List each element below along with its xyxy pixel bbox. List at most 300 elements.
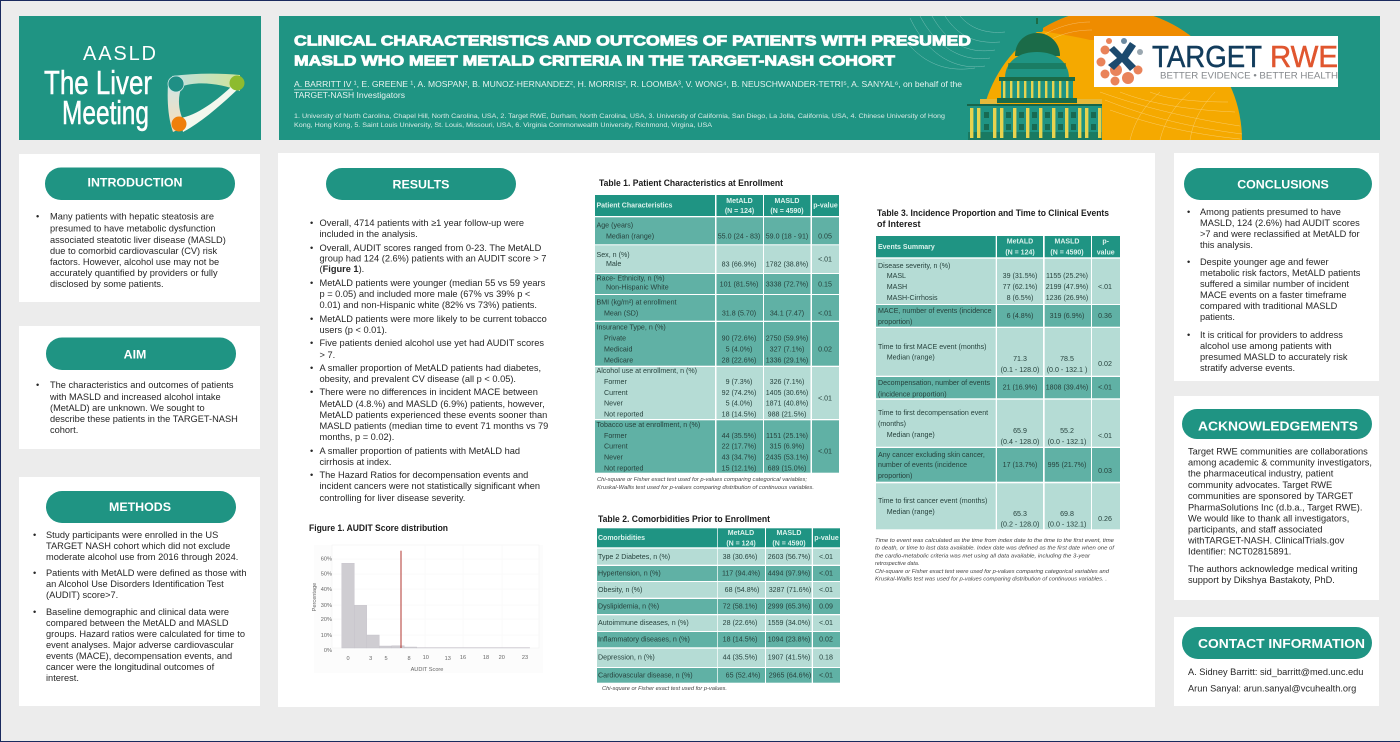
- x-axis labels: 13: [445, 656, 451, 662]
- table 3: clinical events: 39 (31.5%): [1003, 272, 1037, 280]
- table 3: clinical events: 1236 (26.9%): [1046, 294, 1088, 302]
- logo text: AASLD: AASLD: [83, 43, 156, 65]
- table 1: patient characteristics: 55.0 (24 - 83): [718, 232, 760, 240]
- text block: methods: interest.: [46, 673, 79, 683]
- text block: methods: compared between the MetALD and MASLD: [46, 618, 229, 628]
- table 1: patient characteristics: 1151 (25.1%): [766, 432, 808, 440]
- table 3: clinical events: [876, 236, 1120, 529]
- text block: contacts: Arun Sanyal: arun.sanyal@vcuhealth.org: [1188, 684, 1356, 694]
- axis title: Percentage: Percentage: [312, 583, 318, 611]
- affiliations: 1. University of North Carolina, Chapel Hill, North Carolina, USA, 2. Target RWE, Durham, North Carolina, USA, 3. University of California, San Diego, La Jolla, California, USA, 4. Chinese University of Hong: [294, 113, 946, 120]
- text block: acknowledgements: community advocates. Target RWE: [1188, 480, 1332, 490]
- text block: results bullets: MetALD (4.8.%) and MASLD (6.9%) patients, however,: [320, 399, 545, 409]
- table 3: clinical events: 0.36: [1098, 312, 1112, 320]
- text block: results bullets: users (p < 0.01).: [320, 325, 387, 335]
- text block: acknowledgements: among academic & community investigators,: [1188, 458, 1372, 468]
- authors: A. BARRITT IV ¹, E. GREENE ¹, A. MOSPAN², B. MUNOZ-HERNANDEZ², H. MORRIS², R. LOOMBA³, V. WONG⁴, B. NEUSCHWANDER-TETRI⁵, A. SANYAL⁶, on behalf of the: [294, 79, 962, 89]
- table 1: patient characteristics: Medicare: [604, 356, 633, 364]
- x-axis labels: 5: [384, 656, 388, 662]
- text block: introduction: Many patients with hepatic steatosis are: [50, 212, 214, 222]
- table 3: clinical events: MASL: [887, 272, 906, 280]
- text block: introduction: associated steatotic liver disease (MASLD): [50, 235, 226, 245]
- cutoff line: [400, 551, 402, 648]
- table 1: patient characteristics: 31.8 (5.70): [722, 310, 756, 318]
- table 2: comorbidities: Autoimmune diseases, n (%): [598, 619, 689, 627]
- table 1: patient characteristics: Current: [604, 389, 628, 397]
- heading: conclusions: CONCLUSIONS: [1237, 178, 1329, 192]
- table 1: patient characteristics: 1336 (29.1%): [766, 356, 808, 364]
- text block: introduction: factors. However, alcohol use may not be: [50, 257, 219, 267]
- table 1: patient characteristics: Insurance Type, n (%): [596, 324, 666, 332]
- text block: conclusions: Despite younger age and fewer: [1200, 257, 1329, 267]
- table 3: clinical events: 319 (6.9%): [1050, 312, 1084, 320]
- table 3: clinical events: MASH-Cirrhosis: [887, 294, 938, 302]
- logo text: The Liver Meeting: [44, 64, 152, 131]
- table 3: clinical events: 1155 (25.2%): [1046, 272, 1088, 280]
- x-axis labels: 16: [460, 655, 466, 661]
- table 2: comorbidities: (N = 4590): [772, 540, 806, 548]
- table 2: comorbidities: Obesity, n (%): [598, 586, 642, 594]
- text block: results bullets: cirrhosis at index.: [320, 457, 391, 467]
- table 3: clinical events: 77 (62.1%): [1003, 283, 1037, 291]
- heading: figure 1: Figure 1. AUDIT Score distribution: [309, 523, 448, 533]
- icon: Target RWE cluster: [1096, 38, 1143, 86]
- text block: results bullets: incident cancers were not statistically significant when: [320, 481, 540, 491]
- authors: TARGET-NASH Investigators: [294, 90, 405, 100]
- text block: aim: describe these patients in the TARGET-NASH: [50, 414, 238, 424]
- table 3: clinical events: 78.5: [1060, 355, 1074, 363]
- table 3: clinical events: MASLD: [1055, 238, 1079, 246]
- table 1: patient characteristics: 1871 (40.8%): [766, 400, 808, 408]
- text block: results bullets: •: [310, 387, 313, 397]
- text block: methods: TARGET NASH cohort which did not exclude: [46, 541, 230, 551]
- banner artwork: sunburst circle and capitol: [906, 16, 1242, 140]
- text block: results bullets: 0.01) and non-Hispanic white (82% vs 73%) patients.: [320, 300, 537, 310]
- panel: results: [278, 153, 1155, 707]
- table 3: clinical events: proportion): [878, 318, 912, 326]
- text block: acknowledgements: the pharmaceutical industry, patient: [1188, 469, 1334, 479]
- table 1: patient characteristics: Age (years): [596, 222, 633, 230]
- table 2: comorbidities: Comorbidities: [598, 535, 645, 542]
- table 1: patient characteristics: 90 (72.6%): [722, 334, 756, 342]
- panel: acknowledgements: [1174, 396, 1379, 600]
- table 1: patient characteristics: 1405 (30.6%): [766, 389, 808, 397]
- text block: conclusions: alcohol use among patients with: [1200, 341, 1332, 351]
- text block: results bullets: (Figure 1).: [320, 264, 364, 274]
- table 1: patient characteristics: MetALD: [726, 198, 753, 205]
- table 3: clinical events: Disease severity, n (%): [878, 262, 950, 270]
- table 1: patient characteristics: 326 (7.1%): [770, 378, 804, 386]
- panel: AASLD The Liver Meeting logo: [19, 16, 261, 140]
- table 1: patient characteristics: 28 (22.6%): [722, 356, 756, 364]
- table 2: comorbidities: 1559 (34.0%): [768, 619, 810, 627]
- text block: methods: cancer were the longitudinal outcomes of: [46, 662, 215, 672]
- x-axis labels: 0: [346, 656, 350, 662]
- table 1: patient characteristics: <.01: [818, 448, 832, 456]
- x-axis labels: 8: [407, 656, 411, 662]
- table 1: patient characteristics: Race- Ethnicity, n (%): [596, 274, 665, 282]
- table 2: comorbidities: Dyslipidemia, n (%): [598, 603, 659, 611]
- text block: results bullets: obesity, and prevalent CV disease (all p < 0.05).: [320, 374, 516, 384]
- text block: methods: •: [33, 568, 36, 578]
- text block: conclusions: compared with traditional MASLD: [1200, 301, 1338, 311]
- table 3: clinical events: (N = 4590): [1050, 250, 1084, 256]
- y-axis labels: 20%: [321, 617, 332, 623]
- table 1: patient characteristics: 315 (6.9%): [770, 442, 804, 450]
- table 1: patient characteristics: 5 (4.0%): [726, 346, 752, 354]
- table 3: clinical events: 69.8: [1060, 510, 1074, 518]
- table 1: patient characteristics: 34.1 (7.47): [770, 310, 804, 318]
- text block: introduction: disclosed by some patients.: [50, 279, 164, 289]
- table 1: patient characteristics: 92 (74.2%): [722, 389, 756, 397]
- table 1: patient characteristics: 43 (34.7%): [722, 454, 756, 462]
- table 2: comorbidities: [597, 528, 840, 683]
- text block: results bullets: group had 124 (2.6%) patients with an AUDIT score > 7: [320, 254, 546, 264]
- table 3: clinical events: 71.3: [1013, 355, 1027, 363]
- text block: acknowledgements: support by Dikshya Bastakoty, PhD.: [1188, 575, 1335, 585]
- y-axis labels: 30%: [321, 603, 332, 609]
- panel: conclusions: [1174, 153, 1379, 381]
- affiliations: [294, 113, 946, 129]
- table 3: clinical events: (0.0 - 132.1): [1048, 438, 1086, 446]
- table 1: patient characteristics: Former: [604, 432, 627, 440]
- table 1: patient characteristics: Sex, n (%): [596, 251, 630, 259]
- table 3: clinical events: <.01: [1098, 432, 1112, 440]
- text block: aim: cohort.: [50, 425, 78, 435]
- table 3: clinical events: Events Summary: [878, 244, 935, 251]
- table 1: patient characteristics: 689 (15.0%): [768, 464, 806, 472]
- table 2: comorbidities: 0.02: [819, 636, 833, 644]
- heading: introduction: INTRODUCTION: [88, 176, 183, 190]
- table 1: patient characteristics: p-value: [813, 202, 838, 210]
- footnote: table 3: the cardio-metabolic criteria was met using all data available, including the 3-year: [875, 554, 1090, 560]
- text block: results bullets: Overall, 4714 patients with ≥1 year follow-up were: [320, 218, 524, 228]
- table 1: patient characteristics: Alcohol use at enrollment, n (%): [596, 367, 697, 375]
- authors: [294, 79, 962, 100]
- table 1: patient characteristics: Medicaid: [604, 346, 632, 354]
- table 3: clinical events: 995 (21.7%): [1048, 461, 1086, 469]
- table 3: clinical events: Median (range): [887, 431, 935, 439]
- logo: Target RWE: BETTER EVIDENCE • BETTER HEALTH: [1160, 70, 1338, 80]
- text block: contacts: A. Sidney Barritt: sid_barritt@med.unc.edu: [1188, 667, 1363, 677]
- title: [294, 32, 971, 70]
- text block: results bullets: MetALD patients experienced these events sooner than: [320, 410, 547, 420]
- text block: conclusions: stratify adverse events.: [1200, 363, 1295, 373]
- text block: conclusions: •: [1187, 257, 1190, 267]
- table 2: comorbidities: <.01: [819, 672, 833, 680]
- text block: conclusions: this analysis.: [1200, 240, 1253, 250]
- table 1: patient characteristics: 2435 (53.1%): [766, 454, 808, 462]
- table 1: patient characteristics: BMI (kg/m²) at enrollment: [596, 298, 677, 306]
- text block: methods: an Alcohol Use Disorders Identification Test: [46, 579, 224, 589]
- table 2: comorbidities: <.01: [819, 553, 833, 561]
- table 1: patient characteristics: 101 (81.5%): [720, 280, 758, 288]
- text block: conclusions: >7 and were reclassified at MetALD for: [1200, 229, 1360, 239]
- panel: title banner: [279, 16, 1380, 140]
- footnote: table 1: [597, 477, 814, 491]
- table 3: clinical events: 2199 (47.9%): [1046, 283, 1088, 291]
- histogram bars: [342, 563, 530, 648]
- heading: aim: [46, 338, 236, 370]
- table 3: clinical events: 0.02: [1098, 360, 1112, 368]
- text block: acknowledgements: Identifier: NCT02815891.: [1188, 547, 1291, 557]
- table 1: patient characteristics: <.01: [818, 394, 832, 402]
- text block: methods: groups. Hazard ratios were calculated for time to: [46, 629, 245, 639]
- table 1: patient characteristics: Never: [604, 454, 624, 462]
- title: MASLD WHO MEET METALD CRITERIA IN THE TARGET-NASH COHORT: [294, 52, 896, 70]
- heading: acknowledgements: [1182, 409, 1372, 439]
- heading: methods: METHODS: [109, 500, 171, 514]
- axis title: AUDIT Score: AUDIT Score: [411, 667, 443, 673]
- table 3: clinical events: Median (range): [887, 508, 935, 516]
- footnote: table 3: Chi-square or Fisher exact test were used for p-values comparing categorical variables and: [875, 569, 1110, 575]
- logo: Target RWE: TARGET: [1152, 39, 1262, 74]
- table 2: comorbidities: Inflammatory diseases, n (%): [598, 636, 690, 644]
- text block: results bullets: p = 0.05) and included more male (67% vs 39% p <: [320, 289, 530, 299]
- footnote: table 3: [875, 538, 1115, 583]
- text block: results bullets: The Hazard Ratios for decompensation events and: [320, 470, 528, 480]
- table 2: comorbidities: 38 (30.6%): [723, 553, 757, 561]
- icon: liver triangle swoosh: [168, 74, 244, 132]
- affiliations: Kong, Hong Kong, 5. Saint Louis University, St. Louis, Missouri, USA, 6. Virginia Commonwealth University, Richmond, Virgina, USA: [294, 122, 713, 129]
- table 2: comorbidities: 2999 (65.3%): [768, 603, 810, 611]
- table 3: clinical events: (months): [878, 420, 906, 428]
- text block: introduction: due to comorbid cardiovascular (CV) risk: [50, 246, 217, 256]
- table 2: comorbidities: 65 (52.4%): [726, 672, 760, 680]
- table 2: comorbidities: 0.09: [819, 603, 833, 611]
- heading: aim: AIM: [124, 348, 146, 362]
- table 1: patient characteristics: 0.02: [818, 346, 832, 354]
- text block: results bullets: Overall, AUDIT scores ranged from 0-23. The MetALD: [320, 243, 542, 253]
- text block: results bullets: A smaller proportion of MetALD patients had diabetes,: [320, 363, 541, 373]
- text block: results bullets: A smaller proportion of patients with MetALD had: [320, 446, 520, 456]
- table 3: clinical events: MetALD: [1007, 238, 1033, 246]
- table 2: comorbidities: 2603 (56.7%): [768, 553, 810, 561]
- text block: methods: Patients with MetALD were defined as those with: [46, 568, 247, 578]
- text block: introduction: accurately quantified by providers or fully: [50, 268, 218, 278]
- text block: methods: Study participants were enrolled in the US: [46, 530, 218, 540]
- text block: conclusions: MASLD, 124 (2.6%) had AUDIT scores: [1200, 218, 1360, 228]
- table 1: patient characteristics: 44 (35.5%): [722, 432, 756, 440]
- panel: aim: [19, 326, 260, 449]
- table 2: comorbidities: <.01: [819, 619, 833, 627]
- text block: acknowledgements: The authors acknowledge medical writing: [1188, 564, 1358, 574]
- table 3: clinical events: 65.3: [1013, 510, 1027, 518]
- y-axis labels: 50%: [321, 572, 332, 578]
- text block: methods: (AUDIT) score>7.: [46, 590, 118, 600]
- text block: acknowledgements: PharmaSolutions Inc (d.b.a., Target RWE).: [1188, 503, 1362, 513]
- table 2: comorbidities: Hypertension, n (%): [598, 570, 661, 578]
- table 1: patient characteristics: Median (range): [606, 232, 654, 240]
- table 3: clinical events: Time to first MACE event (months): [878, 343, 987, 351]
- table 2: comorbidities: 2965 (64.6%): [769, 672, 811, 680]
- table 1: patient characteristics: 5 (4.0%): [726, 400, 752, 408]
- text block: conclusions: It is critical for providers to address: [1200, 330, 1343, 340]
- text block: results bullets: •: [310, 243, 313, 253]
- table 1: patient characteristics: 9 (7.3%): [726, 378, 752, 386]
- table 1: patient characteristics: (N = 124): [725, 208, 754, 215]
- table 1: patient characteristics: Patient Characteristics: [596, 202, 672, 210]
- table 2: comorbidities: 0.18: [819, 654, 833, 662]
- table 1: patient characteristics: Non-Hispanic White: [606, 284, 669, 292]
- y-axis labels: 0%: [324, 648, 332, 654]
- table 2: comorbidities: 1094 (23.8%): [768, 636, 810, 644]
- table 1: patient characteristics: Former: [604, 378, 627, 386]
- heading: table 3: of Interest: [877, 219, 921, 229]
- table 3: clinical events: 65.9: [1013, 427, 1027, 435]
- text block: conclusions: metabolic risk factors, MetALD patients: [1200, 268, 1361, 278]
- table 3: clinical events: 1808 (39.4%): [1046, 384, 1088, 392]
- text block: methods: Baseline demographic and clinical data were: [46, 607, 229, 617]
- table 3: clinical events: 8 (6.5%): [1007, 294, 1033, 302]
- heading: table 3: [877, 208, 1109, 229]
- text block: results bullets: •: [310, 338, 313, 348]
- table 3: clinical events: 55.2: [1060, 427, 1074, 435]
- logo: Target RWE: [1094, 36, 1338, 87]
- text block: methods: events (MACE), decompensation events, and: [46, 651, 232, 661]
- table 2: comorbidities: MetALD: [728, 530, 754, 537]
- table 1: patient characteristics: Not reported: [604, 464, 643, 472]
- text block: results bullets: Five patients denied alcohol use yet had AUDIT scores: [320, 338, 544, 348]
- table 2: comorbidities: (N = 124): [726, 540, 756, 548]
- logo text: The Liver Meeting: Meeting: [62, 94, 149, 131]
- table 2: comorbidities: Cardiovascular disease, n (%): [598, 672, 693, 680]
- title: CLINICAL CHARACTERISTICS AND OUTCOMES OF PATIENTS WITH PRESUMED: [294, 32, 971, 50]
- table 3: clinical events: Median (range): [887, 354, 935, 362]
- text block: results bullets: months, p = 0.02).: [320, 432, 394, 442]
- table 1: patient characteristics: 3338 (72.7%): [766, 280, 808, 288]
- text block: introduction: [36, 212, 226, 289]
- table 2: comorbidities: 1907 (41.5%): [768, 654, 810, 662]
- table 2: comorbidities: 117 (94.4%): [722, 570, 760, 578]
- x-axis labels: 20: [499, 655, 505, 661]
- table 1: patient characteristics: Not reported: [604, 410, 643, 418]
- table 3: clinical events: (0.2 - 128.0): [1001, 520, 1039, 528]
- table 3: clinical events: proportion): [878, 472, 912, 480]
- table 1: patient characteristics: 22 (17.7%): [722, 442, 756, 450]
- text block: methods: moderate alcohol use from 2016 through 2024.: [46, 552, 238, 562]
- table 1: patient characteristics: Mean (SD): [604, 310, 638, 318]
- text block: results bullets: MASLD patients (median time to event 71 months vs 79: [320, 421, 548, 431]
- table 3: clinical events: 6 (4.8%): [1007, 312, 1033, 320]
- table 2: comorbidities: Type 2 Diabetes, n (%): [598, 553, 670, 561]
- table 1: patient characteristics: 0.05: [818, 232, 832, 240]
- table 3: clinical events: (0.1 - 128.0): [1001, 366, 1039, 374]
- heading: table 2: Table 2. Comorbidities Prior to Enrollment: [598, 514, 770, 524]
- text block: results bullets: •: [310, 218, 313, 228]
- y-axis labels: 60%: [321, 557, 332, 563]
- table 1: patient characteristics: Never: [604, 400, 624, 408]
- table 3: clinical events: <.01: [1098, 283, 1112, 291]
- table 2: comorbidities: 44 (35.5%): [723, 654, 757, 662]
- text block: results bullets: •: [310, 314, 313, 324]
- table 3: clinical events: MACE, number of events (incidence: [878, 307, 992, 315]
- footnote: table 3: to death, or time to last data available. Index date was defined as the first date when one of: [875, 546, 1115, 552]
- heading: table 1: Table 1. Patient Characteristics at Enrollment: [599, 178, 783, 188]
- text block: aim: (MetALD) are unknown. We sought to: [50, 403, 205, 413]
- heading: table 3: Table 3. Incidence Proportion and Time to Clinical Events: [877, 208, 1109, 218]
- text block: results bullets: •: [310, 470, 313, 480]
- text block: methods: •: [33, 530, 36, 540]
- table 3: clinical events: value: [1097, 250, 1115, 256]
- text block: results bullets: > 7.: [320, 350, 335, 360]
- heading: methods: [46, 491, 236, 523]
- text block: aim: •: [36, 380, 39, 390]
- footnote: table 2: Chi-square or Fisher exact test used for p-values.: [602, 686, 727, 692]
- x-axis labels: 18: [483, 655, 489, 661]
- table 3: clinical events: <.01: [1098, 384, 1112, 392]
- table 1: patient characteristics: 83 (66.9%): [722, 260, 756, 268]
- icon: capitol building: [967, 18, 1102, 140]
- heading: introduction: [45, 168, 235, 200]
- table 3: clinical events: 0.26: [1098, 515, 1112, 523]
- table 3: clinical events: Decompensation, number of events: [878, 379, 990, 387]
- footnote: table 1: Kruskal-Wallis test used for p-values comparing distribution of continuous variables.: [597, 485, 814, 491]
- table 1: patient characteristics: 988 (21.5%): [768, 410, 806, 418]
- table 1: patient characteristics: Tobacco use at enrollment, n (%): [596, 421, 700, 429]
- text block: results bullets: MetALD patients were more likely to be current tobacco: [320, 314, 547, 324]
- table 1: patient characteristics: 59.0 (18 - 91): [766, 232, 808, 240]
- text block: results bullets: •: [310, 446, 313, 456]
- x-axis labels: 23: [522, 655, 528, 661]
- x-axis labels: [346, 655, 528, 662]
- table 3: clinical events: MASH: [887, 283, 907, 291]
- table 1: patient characteristics: 15 (12.1%): [722, 464, 756, 472]
- table 3: clinical events: (N = 124): [1005, 250, 1035, 256]
- table 1: patient characteristics: (N = 4590): [770, 208, 804, 215]
- text block: acknowledgements: withTARGET-NASH. ClinicalTrials.gov: [1187, 536, 1345, 546]
- x-axis labels: 10: [423, 655, 429, 661]
- table 2: comorbidities: MASLD: [777, 530, 801, 537]
- text block: conclusions: •: [1187, 330, 1190, 340]
- text block: introduction: presumed to have metabolic dysfunction: [50, 224, 216, 234]
- text block: methods: event analyses. Major adverse cardiovascular: [46, 640, 234, 650]
- text block: acknowledgements: We would like to thank all investigators,: [1188, 514, 1349, 524]
- footnote: table 3: Time to event was calculated as the time from index date to the time to the first event, time: [875, 538, 1114, 544]
- text block: conclusions: presumed MASLD to accurately risk: [1200, 352, 1348, 362]
- footnote: table 3: Kruskal-Wallis test was used for p-values comparing distribution of continuous variables. .: [875, 577, 1107, 583]
- text block: methods: [33, 530, 247, 683]
- text block: conclusions: •: [1187, 207, 1190, 217]
- table 2: comorbidities: <.01: [819, 570, 833, 578]
- table 2: comorbidities: 72 (58.1%): [723, 603, 757, 611]
- text block: results bullets: •: [310, 363, 313, 373]
- y-axis labels: 10%: [321, 633, 332, 639]
- table 1: patient characteristics: 0.15: [818, 280, 832, 288]
- heading: contact information: CONTACT INFORMATION: [1198, 636, 1365, 651]
- table 2: comorbidities: 4494 (97.9%): [768, 570, 810, 578]
- text block: results bullets: MetALD patients were younger (median 55 vs 59 years: [320, 278, 546, 288]
- table 1: patient characteristics: [595, 195, 839, 473]
- x-axis labels: 3: [369, 656, 372, 662]
- logo text: The Liver Meeting: The Liver: [44, 64, 152, 101]
- table 2: comorbidities: 18 (14.5%): [723, 636, 757, 644]
- footnote: table 1: Chi-square or Fisher exact test used for p-values comparing categorical variables;: [597, 477, 808, 483]
- heading: contact information: [1182, 627, 1372, 659]
- table 3: clinical events: Time to first cancer event (months): [878, 497, 987, 505]
- text block: acknowledgements: communities are sponsored by TARGET: [1188, 491, 1354, 501]
- table 2: comorbidities: Depression, n (%): [598, 654, 655, 662]
- text block: conclusions: Among patients presumed to have: [1200, 207, 1341, 217]
- table 3: clinical events: Any cancer excluding skin cancer,: [878, 451, 985, 459]
- table 3: clinical events: (0.4 - 128.0): [1001, 438, 1039, 446]
- y-axis labels: [321, 557, 332, 654]
- table 1: patient characteristics: Male: [606, 260, 621, 268]
- table 3: clinical events: 17 (13.7%): [1003, 461, 1037, 469]
- text block: acknowledgements: Target RWE communities are collaborations: [1188, 447, 1368, 457]
- table 2: comorbidities: 3287 (71.6%): [769, 586, 811, 594]
- text block: methods: •: [33, 607, 36, 617]
